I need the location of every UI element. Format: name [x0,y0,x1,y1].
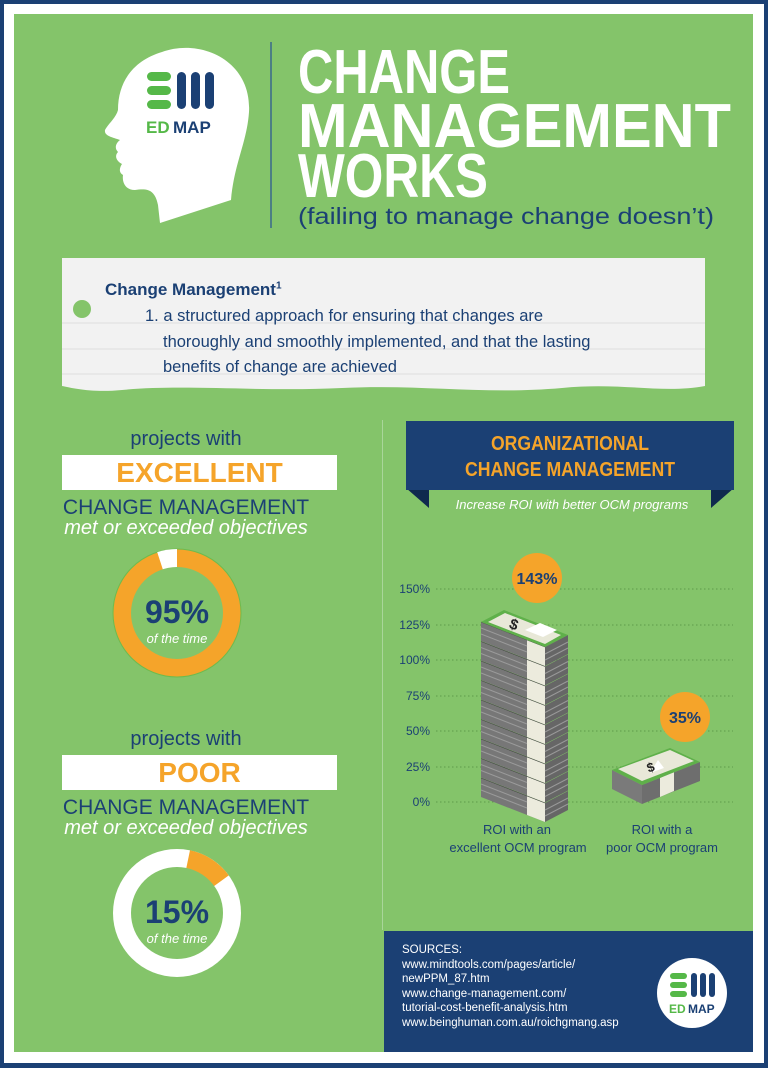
bar chart: ROI money stacks: 150% [399,582,430,596]
panel: excellent change management: projects with [130,428,242,450]
definition card: benefits of change are achieved [163,358,397,376]
panel: excellent change management [62,428,337,678]
bar chart: ROI money stacks: poor OCM program [606,840,718,855]
panel: poor change management: met or exceeded objectives [64,817,308,839]
panel: sources: newPPM_87.htm [402,973,490,985]
stack big: $ [507,615,521,635]
logo: ED MAP mark [146,72,214,137]
definition card: thoroughly and smoothly implemented, and that the lasting [163,332,590,350]
logo: ED MAP circle: ED [669,1002,686,1016]
donut chart 95%: of the time [147,631,207,646]
panel: poor change management: projects with [130,728,242,750]
icon: head silhouette [105,48,249,223]
panel: poor change management: POOR [158,757,241,788]
bar chart: ROI money stacks: 25% [406,760,430,774]
divider between columns [382,420,383,930]
bar chart: ROI money stacks: 0% [413,795,430,809]
donut chart 95%: 95% [145,594,209,630]
logo: ED MAP mark: ED [146,118,170,137]
banner: organizational change management [406,421,734,512]
stack big [481,610,568,822]
callout 35% [660,692,710,742]
header: head logo [104,48,250,223]
definition card: 1. a structured approach for ensuring that changes are [145,307,543,325]
stack small [612,748,700,804]
bar chart: ROI money stacks: ROI with a [632,822,693,837]
definition card: Change Management1 [105,280,282,299]
logo: ED MAP mark: MAP [173,118,211,137]
banner: organizational change management: CHANGE MANAGEMENT [465,459,675,481]
banner: organizational change management: Increase ROI with better OCM programs [456,497,689,512]
definition card [62,258,705,391]
donut chart 95% [112,548,242,678]
panel: sources: www.change-management.com/ [402,988,566,1000]
panel: poor change management: CHANGE MANAGEMENT [63,796,309,819]
panel: sources: SOURCES: [402,944,462,956]
title: CHANGE [298,40,510,107]
callout 35%: 35% [669,710,701,727]
donut chart 15%: of the time [147,931,207,946]
logo: ED MAP circle [657,958,727,1028]
title: WORKS [298,142,488,211]
stack small: $ [645,759,657,776]
callout 143% [512,553,562,603]
panel: sources: www.mindtools.com/pages/article/ [402,959,575,971]
panel: sources: tutorial-cost-benefit-analysis.htm [402,1002,568,1014]
panel: excellent change management: CHANGE MANAGEMENT [63,496,309,519]
bar chart: ROI money stacks: 75% [406,689,430,703]
panel: excellent change management: met or exceeded objectives [64,517,308,539]
bar chart: ROI money stacks: 50% [406,724,430,738]
title [298,40,731,229]
bar chart: ROI money stacks: ROI with an [483,822,551,837]
donut chart 15% [113,849,241,977]
donut chart 15%: 15% [145,894,209,930]
panel: sources [384,931,753,1052]
panel: sources: www.beinghuman.com.au/roichgmang.asp [402,1017,619,1029]
divider line [270,42,272,228]
title: MANAGEMENT [298,92,731,161]
panel: poor change management [62,728,337,977]
bar chart: ROI money stacks: 125% [399,618,430,632]
banner: organizational change management: ORGANIZATIONAL [491,433,649,455]
panel: excellent change management: EXCELLENT [116,457,283,488]
bar chart: ROI money stacks: 100% [399,653,430,667]
bar chart: ROI money stacks [399,553,733,855]
callout 143%: 143% [517,571,557,588]
bar chart: ROI money stacks: excellent OCM program [449,840,587,855]
title: (failing to manage change doesn’t) [298,203,714,229]
logo: ED MAP circle: MAP [688,1002,715,1016]
